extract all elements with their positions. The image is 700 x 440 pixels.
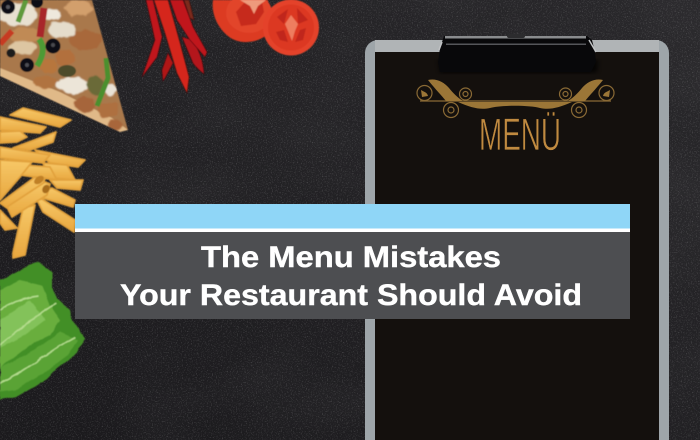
penne pasta pile [0,108,85,258]
grey title panel [75,232,630,319]
tomato slices [213,0,319,56]
title banner [75,204,630,319]
white divider [75,228,630,232]
menu sheet [375,52,659,440]
red chili peppers [142,0,207,93]
menu title: MENÜ [479,109,561,160]
menu ornament [417,79,614,118]
metal clip [438,34,598,73]
pizza slice [0,0,128,132]
title line two: Your Restaurant Should Avoid [120,279,582,312]
lettuce leaf [0,261,85,400]
clipboard [365,34,669,440]
clipboard board [365,40,669,440]
title line one: The Menu Mistakes [201,241,501,274]
blue stripe [75,204,630,228]
